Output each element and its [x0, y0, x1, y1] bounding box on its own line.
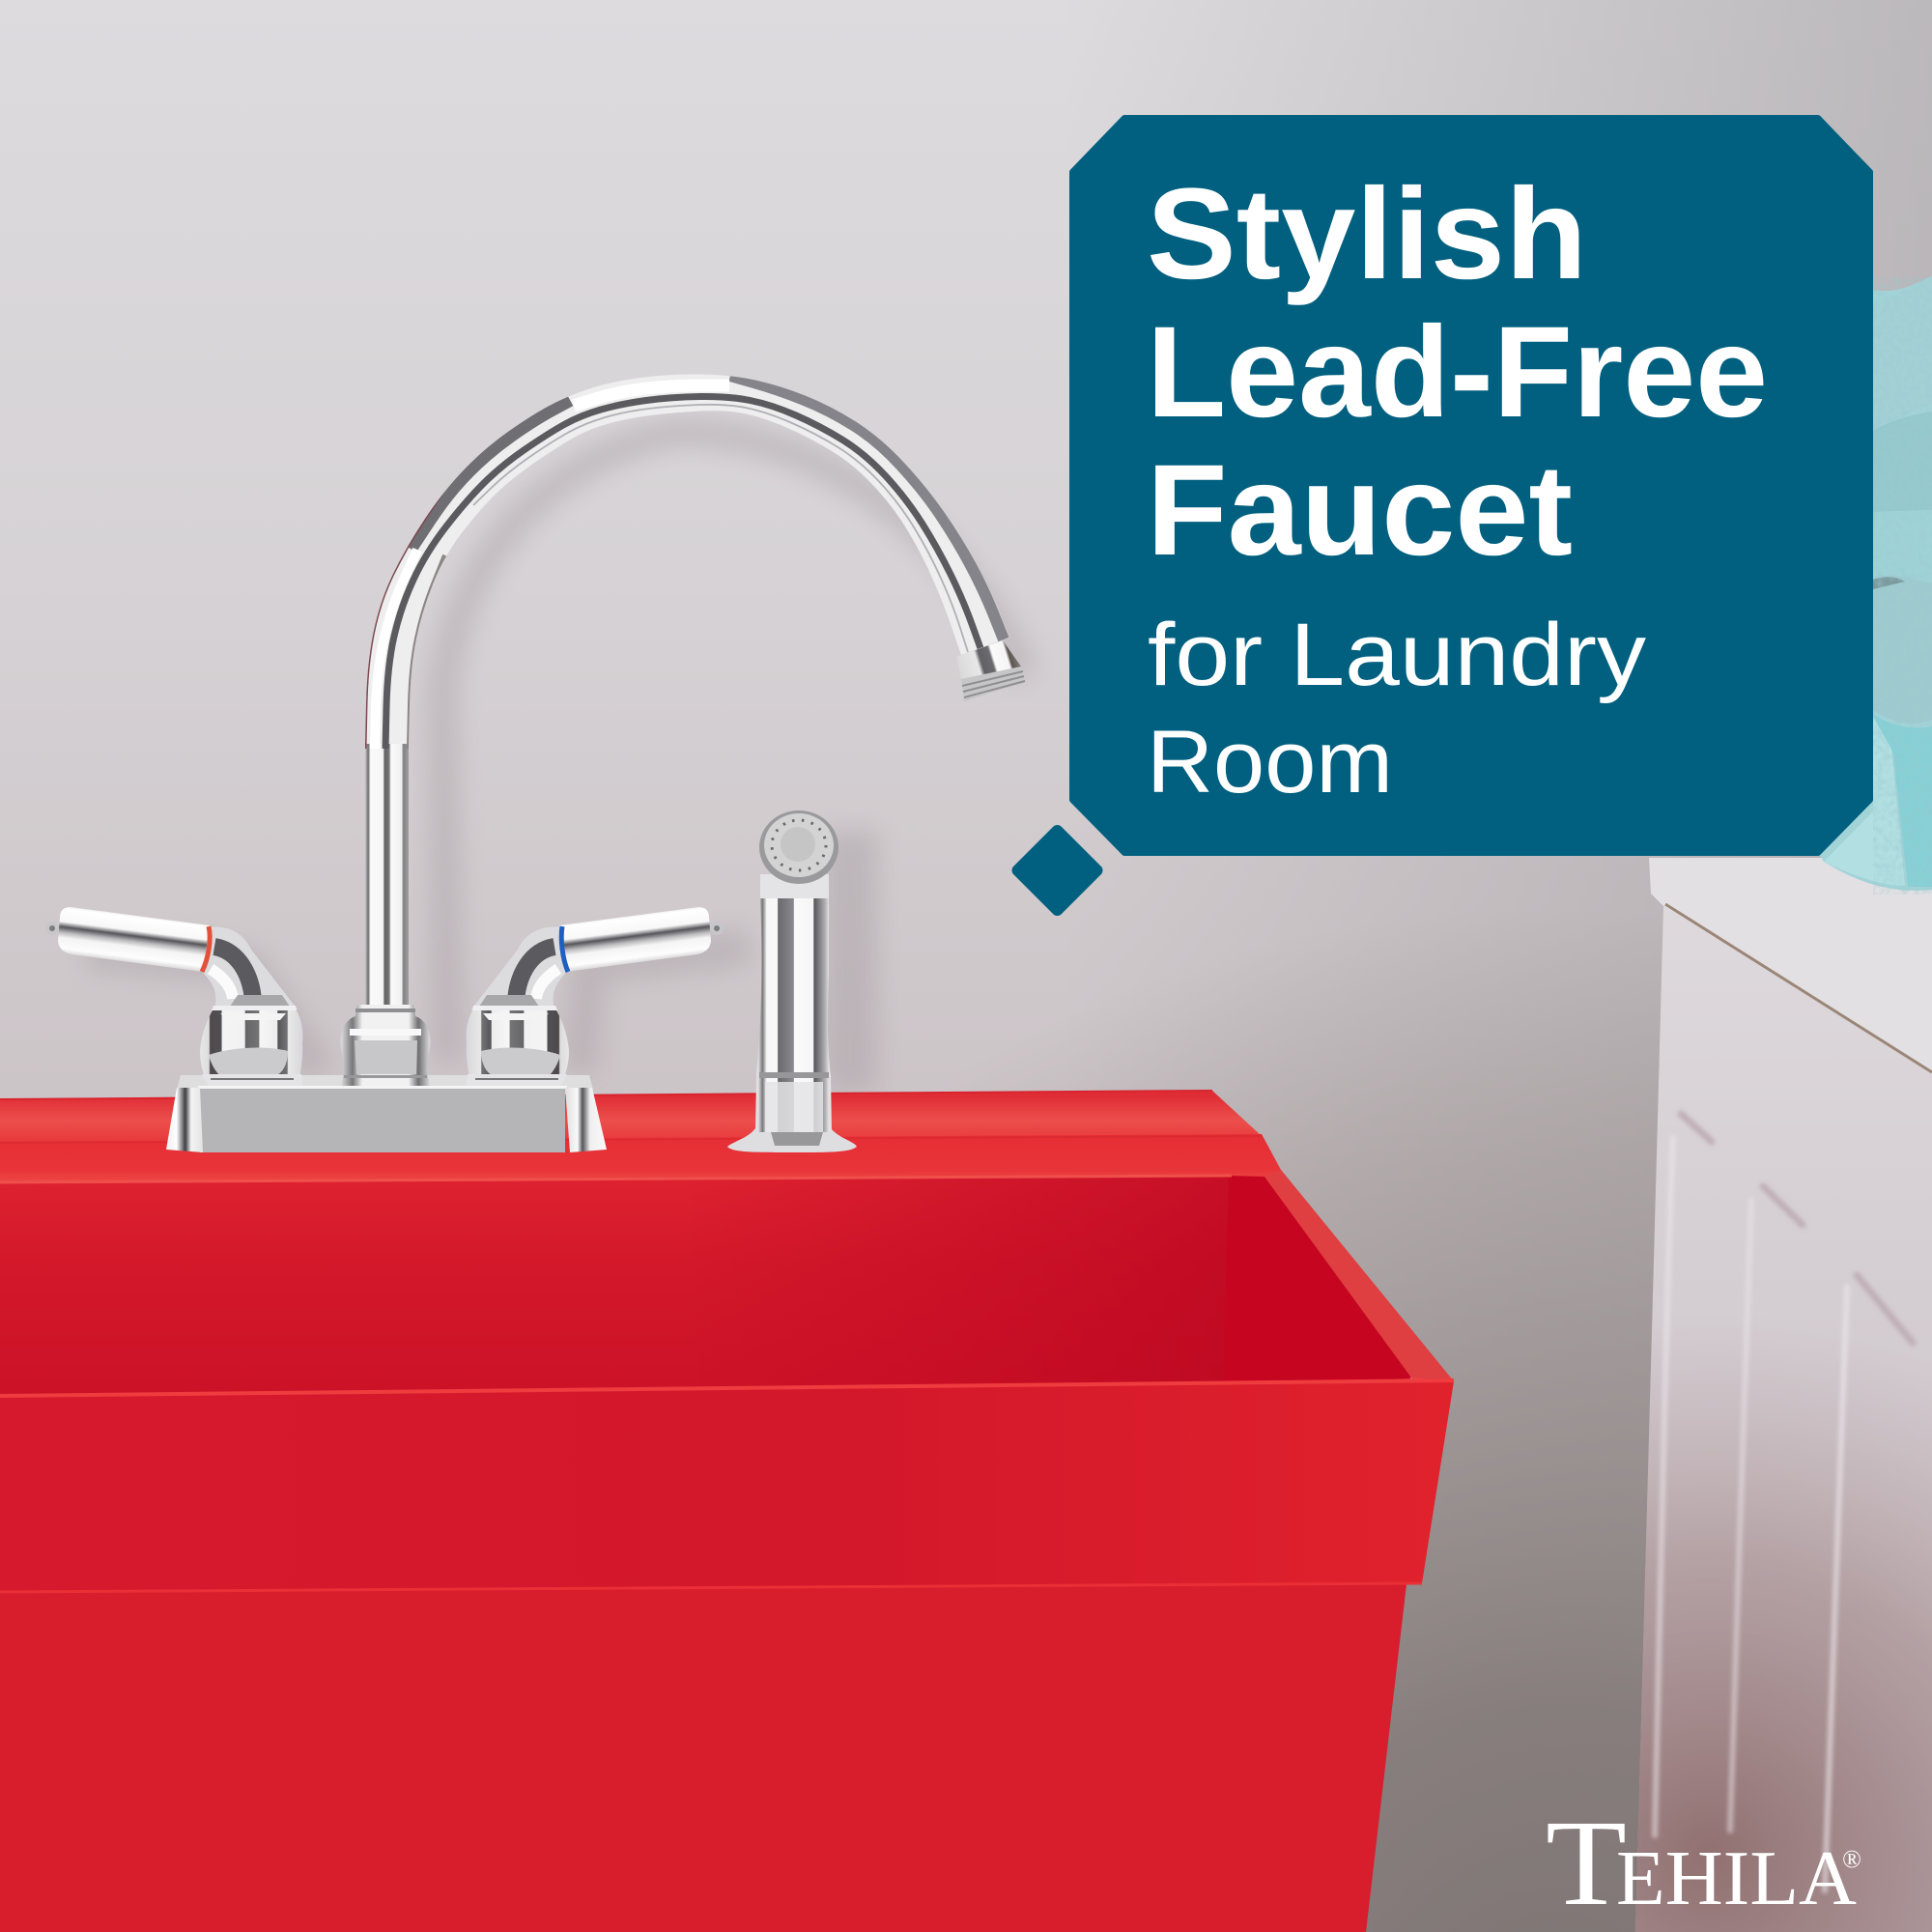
center hub [340, 1005, 431, 1086]
logo: Tehila: T [1546, 1796, 1627, 1931]
rim right strip [1264, 1170, 1454, 1381]
basin right wall [1223, 1176, 1411, 1395]
panel: octagon [1072, 118, 1870, 853]
rear ledge [0, 1091, 1262, 1144]
white stripe left [375, 550, 417, 749]
red ring [202, 926, 210, 972]
logo: Tehila [1546, 1796, 1861, 1931]
inner pale band lines [473, 405, 968, 652]
heading: Stylish: Stylish [1147, 162, 1587, 306]
outer grey band, left [411, 400, 570, 549]
right handle (cold) [466, 907, 724, 1086]
base plate [166, 1075, 607, 1152]
inner grey edge [410, 555, 445, 749]
sprayer body [755, 874, 832, 1132]
red utility sink [0, 1091, 1454, 1932]
outer edge line [365, 490, 444, 749]
lower body [0, 1584, 1406, 1932]
deck [0, 1134, 1454, 1381]
heading: Faucet: Faucet [1147, 439, 1573, 582]
curved spout [365, 374, 1009, 1005]
heading: Lead-Free: Lead-Free [1147, 300, 1768, 444]
basin back wall [0, 1176, 1411, 1397]
callout pointer diamond [1018, 831, 1097, 910]
logo: Tehila: ® [1842, 1845, 1861, 1873]
subheading: for Laundry: for Laundry [1148, 606, 1646, 704]
faucet [45, 374, 1025, 1152]
sprayer flange [727, 1128, 857, 1152]
left handle (hot) [45, 907, 303, 1086]
spout outlet [956, 640, 1025, 701]
blue ring [561, 926, 568, 972]
washer front face [1635, 906, 1932, 1932]
outer grey band, right [730, 376, 1004, 639]
white highlight top [574, 385, 729, 406]
washer top slab [1649, 858, 1932, 1074]
logo: Tehila: EHILA [1616, 1836, 1857, 1921]
towels stack [1816, 276, 1932, 895]
washer seam line [1665, 904, 1932, 1072]
sprayer head [759, 810, 838, 884]
dark reflection band [385, 396, 980, 749]
callout panel [1018, 118, 1870, 910]
faucet shadow on wall [87, 432, 1024, 1092]
front band [0, 1381, 1454, 1593]
washer machine [1635, 858, 1932, 1932]
washer embossed panels [1655, 1114, 1913, 1890]
side sprayer [727, 810, 857, 1152]
subheading: Room: Room [1147, 713, 1393, 811]
